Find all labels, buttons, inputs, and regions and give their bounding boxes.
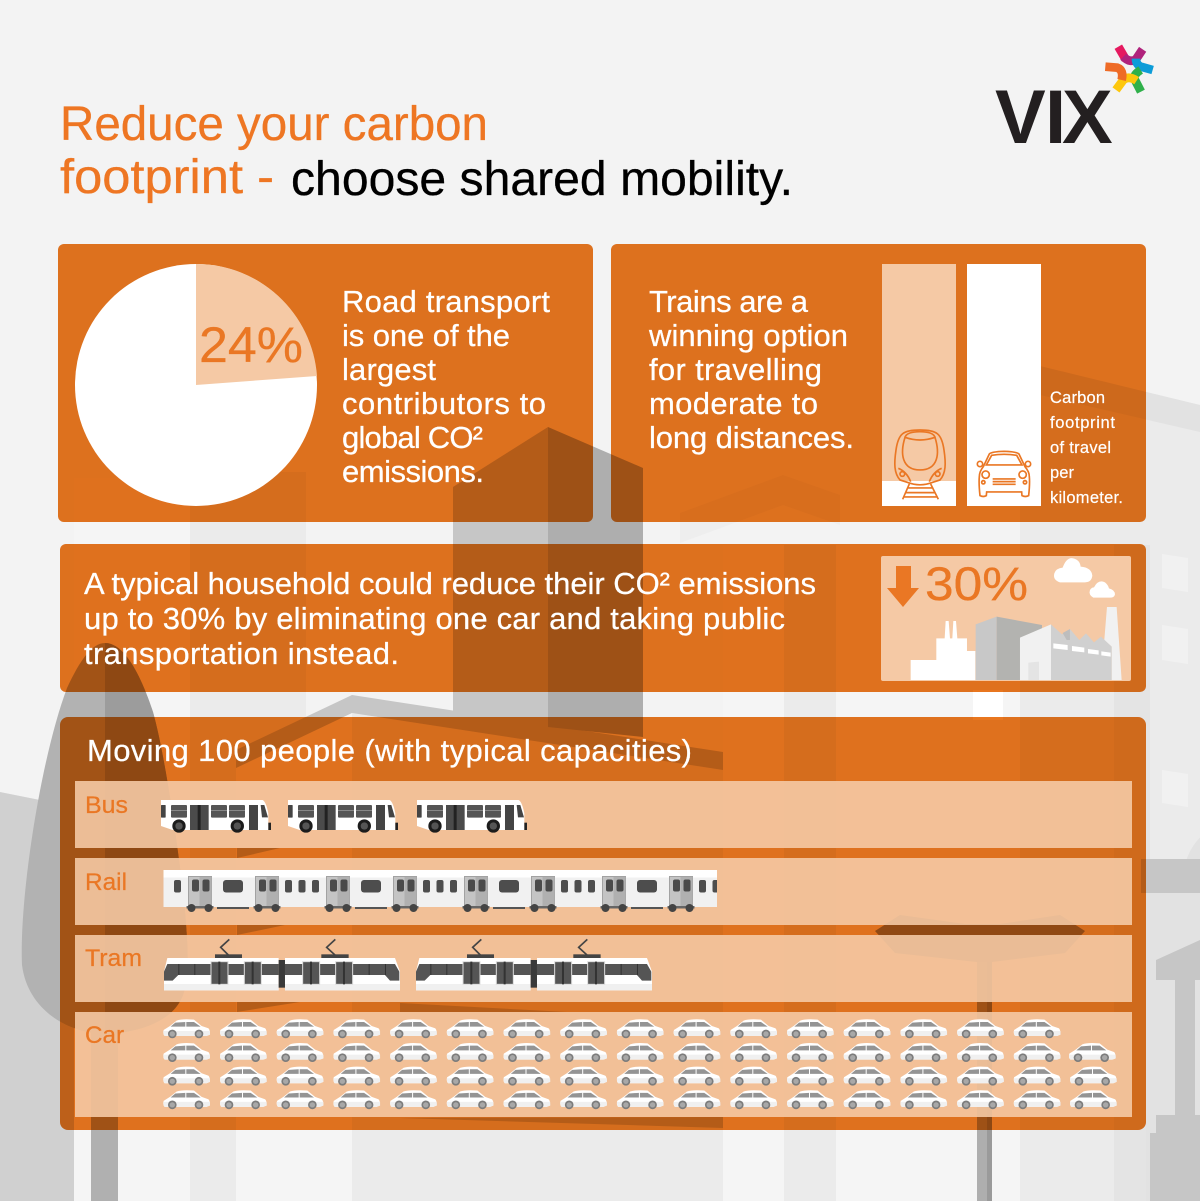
background: left hill xyxy=(0,792,74,1201)
panel: road transport xyxy=(58,244,593,522)
row: car xyxy=(75,1012,1132,1117)
background: low building roof xyxy=(236,695,723,770)
title: choose shared mobility. xyxy=(291,153,793,206)
icon: multicolour star xyxy=(1105,47,1153,92)
text block: moderate to xyxy=(649,386,818,421)
text block: long distances. xyxy=(649,420,854,455)
text block: for travelling xyxy=(649,352,822,387)
icon: trams xyxy=(164,939,652,990)
background: city silhouette xyxy=(0,366,1200,1201)
inset: factory xyxy=(881,556,1131,681)
text block xyxy=(84,566,816,671)
panel: moving 100 people xyxy=(60,717,1146,1130)
row: bus xyxy=(75,781,1132,848)
caption xyxy=(1050,389,1123,507)
pie chart xyxy=(75,264,317,506)
text block: contributors to xyxy=(342,386,546,421)
logo: VIX: VIX xyxy=(995,75,1113,160)
bar: car xyxy=(967,264,1041,506)
text block: Road transport xyxy=(342,284,550,319)
row: bus: Bus xyxy=(85,792,128,819)
caption: kilometer. xyxy=(1050,489,1123,507)
background: street lamp xyxy=(875,915,1085,1201)
title: Reduce your carbon xyxy=(60,98,488,151)
caption: footprint xyxy=(1050,414,1115,432)
row: rail: Rail xyxy=(85,869,127,896)
caption: Carbon xyxy=(1050,389,1105,407)
icon: factory xyxy=(911,607,1122,680)
stat: 30% xyxy=(925,557,1028,610)
text block: is one of the xyxy=(342,318,510,353)
icon: train xyxy=(895,430,945,499)
row: tram: Tram xyxy=(85,945,142,972)
icon: buses xyxy=(161,800,527,833)
caption: per xyxy=(1050,464,1074,482)
text block: global CO² xyxy=(342,420,483,455)
icon: down arrow xyxy=(887,566,919,607)
text block: transportation instead. xyxy=(84,636,399,671)
icon: car xyxy=(977,451,1031,496)
icon: cars xyxy=(163,1019,1117,1109)
row: rail xyxy=(75,858,1132,925)
icon: train carriages xyxy=(164,870,720,912)
text block: Trains are a xyxy=(649,284,809,319)
panel: trains xyxy=(611,244,1146,522)
pie chart: 24% xyxy=(199,317,303,373)
text block: up to 30% by eliminating one car and taking public xyxy=(84,601,785,636)
text block: largest xyxy=(342,352,436,387)
background: central tower xyxy=(453,427,548,727)
text block xyxy=(648,284,854,455)
text block: emissions. xyxy=(342,454,484,489)
text block: winning option xyxy=(648,318,848,353)
row: tram xyxy=(75,935,1132,1002)
background: tree xyxy=(22,643,188,1201)
panel: household xyxy=(60,544,1146,692)
row: car: Car xyxy=(85,1022,124,1049)
caption: of travel xyxy=(1050,439,1111,457)
text block xyxy=(342,284,550,489)
title: footprint - xyxy=(60,151,274,204)
text block: A typical household could reduce their CO² emissions xyxy=(84,566,816,601)
heading: Moving 100 people (with typical capacities) xyxy=(87,733,692,768)
title xyxy=(60,98,793,206)
bar: train xyxy=(882,264,956,506)
background: right temple xyxy=(1141,859,1200,1201)
logo: VIX xyxy=(995,47,1153,160)
icon: clouds xyxy=(1054,558,1115,598)
